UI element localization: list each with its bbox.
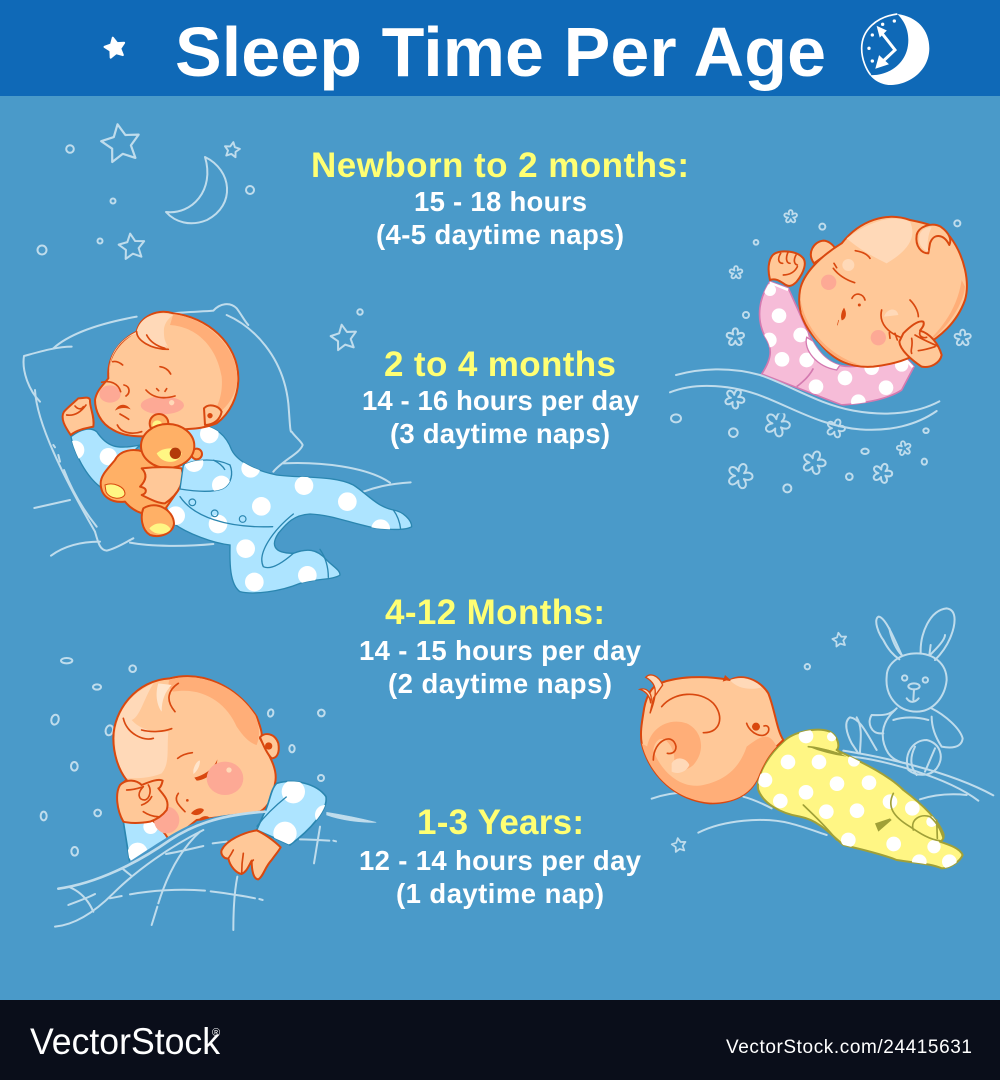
heading: newborn: (4-5 daytime naps) [376,219,624,250]
sleeve under hand [123,820,170,863]
heading: 4-12 months: (2 daytime naps) [388,668,612,699]
pillow lines [24,304,411,556]
pajamas [760,282,914,405]
heading: 2 to 4 months [362,345,640,449]
heading: 2 to 4 months: (3 daytime naps) [390,418,610,449]
heading: 1-3 years: 12 - 14 hours per day [359,845,642,876]
yellow pajamas [758,730,963,868]
heading: 4-12 months: 14 - 15 hours per day [359,635,642,666]
blanket fill [50,811,283,940]
footer: ® [212,1027,220,1039]
heading: 2 to 4 months: 14 - 16 hours per day [362,385,640,416]
hair curl [916,225,950,253]
footer url: VectorStock.com/24415631 [726,1037,972,1058]
heading: 1-3 years: (1 daytime nap) [396,878,604,909]
blanket lines [55,812,376,930]
baby in pink with flowers [670,210,971,492]
heading: 4-12 months [359,593,642,699]
head [799,217,967,367]
face [821,275,836,290]
toy bunny and bed lines [652,608,993,852]
baby in yellow lying on tummy [640,675,963,869]
heading: newborn: Newborn to 2 months: [311,146,689,185]
arm [257,781,326,845]
heading: 1-3 years [359,803,642,909]
icon: moon clock [862,14,929,85]
raised fist [769,251,805,286]
fist [117,780,168,823]
teddy [101,414,202,536]
fist [63,398,94,435]
body [140,425,412,593]
star and dot beside pillow [329,309,363,351]
heading: 4-12 months: 4-12 Months: [385,593,605,632]
hand by cheek [899,321,942,367]
head [641,677,783,803]
hair curl [640,675,663,713]
flowers and dots [671,210,971,492]
head [113,676,276,842]
icon: header star [103,36,127,58]
heading: newborn: 15 - 18 hours [414,186,587,217]
head [95,312,238,436]
night sky decoration [38,121,254,260]
sleeve over teddy [180,460,232,491]
hand [221,830,281,879]
baby sleeping under blanket [41,658,376,940]
hand on teddy [140,467,183,503]
nose and mouth [176,793,185,812]
ear [204,405,222,425]
baby in blue with teddy on pillow [24,304,412,593]
header band [0,0,1000,96]
ear [811,241,835,263]
footer [0,1000,1000,1080]
footer logo: VectorStock [30,1021,220,1062]
title: Sleep Time Per Age [175,13,826,91]
heading: 1-3 years: 1-3 Years: [417,803,584,842]
bubbles [41,658,325,856]
heading: newborn [311,146,689,250]
ear [260,734,279,758]
cheeks [141,396,184,414]
blanket cutting [760,374,873,413]
arm sleeve [71,429,140,487]
heading: 2 to 4 months: 2 to 4 months [384,345,616,384]
cheek [207,762,243,795]
